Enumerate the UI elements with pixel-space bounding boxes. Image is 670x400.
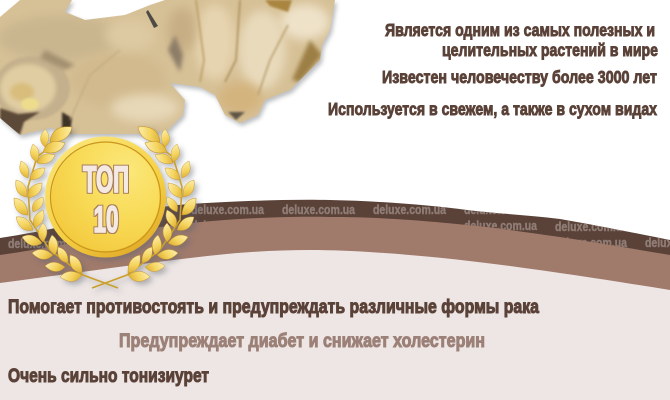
- medal text: 10: 10: [94, 199, 118, 240]
- light lower panel: [0, 250, 670, 400]
- medal text: ТОП: ТОП: [83, 159, 129, 200]
- medal disc: [45, 136, 166, 258]
- watermark text: deluxe.com.ua: [191, 202, 265, 217]
- watermark text: deluxe.com.ua: [555, 219, 629, 234]
- watermark text: deluxe.com.ua: [554, 235, 628, 250]
- fact text: upper right: [328, 20, 658, 119]
- medium brown band: [0, 217, 670, 320]
- ginger knob: [0, 56, 70, 120]
- watermark text: [8, 202, 670, 251]
- dark brown band: [0, 200, 670, 300]
- benefit text: lower panel: [8, 297, 539, 387]
- gold medal with laurel wreath: [10, 122, 200, 288]
- watermark text: deluxe.com.ua: [282, 202, 356, 217]
- right laurel branch: [92, 122, 200, 288]
- benefit: diabetes: Предупреждает диабет и снижает холестерин: [119, 331, 485, 352]
- left laurel branch: [10, 122, 118, 288]
- benefit: cancer: Помогает противостоять и предупреждать различные формы рака: [8, 297, 539, 318]
- watermark text: deluxe.com.ua: [191, 218, 265, 233]
- watermark text: deluxe.com.ua: [8, 236, 82, 251]
- watermark text: deluxe.com.ua: [464, 218, 538, 233]
- benefit: tonic: Очень сильно тонизиурет: [8, 366, 209, 387]
- ginger root photo: [0, 0, 340, 140]
- watermark text: deluxe.com.ua: [464, 202, 538, 217]
- watermark text: deluxe.com.ua: [373, 202, 447, 217]
